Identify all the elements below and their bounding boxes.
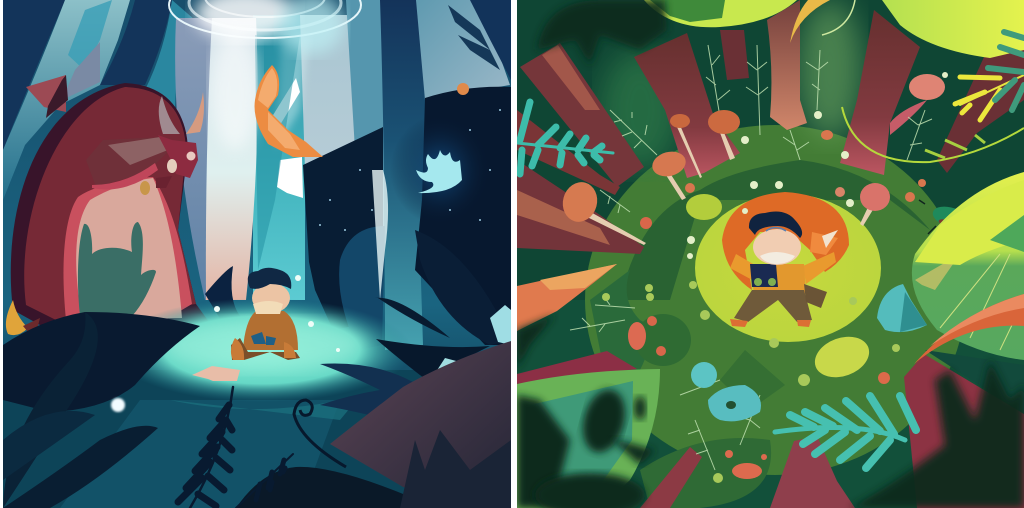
right foliage [320,230,490,414]
light rings at top [169,0,361,38]
clearing [142,299,401,400]
top leaves [644,0,1024,58]
small sprouts [687,72,948,259]
light beam and diamond [274,33,308,132]
vine [842,107,1024,162]
background trees [3,0,511,350]
small white plants [570,45,932,470]
dragon [11,75,212,326]
dragon hand [156,176,172,188]
orange leaf right [914,294,1024,364]
map on ground [192,366,240,381]
head [158,135,198,178]
fox [255,65,323,157]
center lawn [695,194,881,342]
fern top right [955,32,1024,120]
plant in front of dragon [78,222,156,316]
boy sitting [231,268,300,360]
stars [319,109,501,231]
panel: left night forest [3,0,511,508]
firefly glow [111,398,125,412]
dark foreground silhouettes [517,0,1024,508]
wing [26,75,66,112]
flame [6,300,28,335]
dark foliage left mound [3,312,200,508]
panel: right daytime forest [517,0,1024,508]
dark teal wedge behind right [925,350,1024,414]
water stones [691,284,927,421]
boy lying [730,212,836,327]
large leaf right [912,172,1024,360]
glowing tuft [416,150,462,193]
second fern [236,454,293,508]
orange fox curled [722,192,849,290]
ground [585,125,965,475]
curled fern stem [294,400,346,467]
beetle [919,200,994,239]
horns [159,96,180,134]
bottom-left leaves [517,264,660,508]
tree trunks [517,0,1024,508]
pale spiky tufts [490,305,511,345]
mushrooms [558,74,945,479]
fern frond [178,387,233,508]
dark starry rocks right [303,127,383,335]
fern left top [517,102,613,174]
green light glow [798,0,862,140]
fern bottom right [775,396,916,468]
orange creature on rock [457,83,469,95]
bottom dark mound [238,466,403,508]
dark lily shadow [205,266,238,316]
lower ground [3,370,422,508]
brown dark rock [330,341,511,488]
grass sparks [214,275,340,352]
